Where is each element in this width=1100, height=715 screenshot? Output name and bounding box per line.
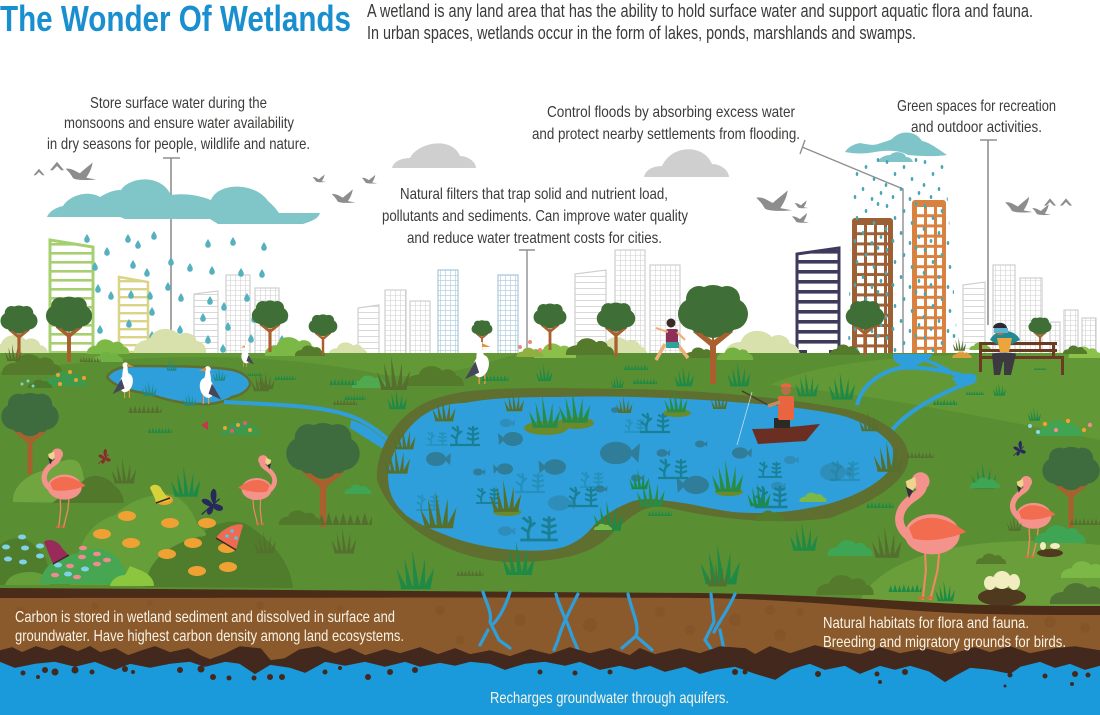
soil layer <box>0 590 1100 670</box>
soil mottling <box>15 600 1090 645</box>
grey clouds <box>392 143 729 177</box>
orange flowers <box>93 495 237 576</box>
teal rain cloud, left <box>47 179 320 224</box>
label: carbon storage: Carbon is stored in wetland sediment and dissolved in surface and <box>15 609 395 626</box>
buildings: left green and yellow <box>50 240 148 355</box>
label: natural filters: Natural filters that trap solid and nutrient load, <box>400 186 668 203</box>
man on bench with binoculars <box>979 323 1064 375</box>
label: store surface water: monsoons and ensure water availability <box>64 115 294 132</box>
big pond <box>377 388 908 562</box>
label: carbon storage <box>15 609 404 645</box>
label: recharges groundwater: Recharges groundwater through aquifers. <box>490 690 729 707</box>
butterfly wings <box>150 485 170 503</box>
building: dark tower <box>797 248 839 355</box>
label: natural habitats: Natural habitats for flora and fauna. <box>823 615 1029 632</box>
small nest <box>1037 542 1063 557</box>
connector: control floods <box>800 140 903 353</box>
grass tufts <box>5 337 1100 601</box>
label: control floods <box>532 104 800 143</box>
trees <box>0 285 1100 528</box>
fish <box>426 407 852 536</box>
scattered rocks <box>20 660 1090 688</box>
runner <box>656 318 688 360</box>
groundwater <box>0 660 1100 715</box>
dark rock band <box>0 647 1100 680</box>
label: carbon storage: groundwater. Have highest carbon density among land ecosystems. <box>15 628 404 645</box>
ground <box>0 353 1100 612</box>
groundwater roots <box>480 592 735 650</box>
background buildings <box>50 200 1096 355</box>
intro text <box>367 1 1033 43</box>
light background bushes <box>0 329 800 357</box>
buildings: grey skyline <box>194 250 1096 355</box>
label: natural habitats <box>823 615 1066 651</box>
birds <box>34 162 1072 223</box>
rain, right <box>848 158 958 352</box>
label: natural filters: pollutants and sediments. Can improve water quality <box>382 208 688 225</box>
connector: store water <box>163 158 180 360</box>
raindrops, left <box>84 231 288 373</box>
soil top band <box>0 588 1100 615</box>
label: store surface water <box>47 95 310 153</box>
label: green spaces: and outdoor activities. <box>911 119 1042 136</box>
label: store surface water: in dry seasons for people, wildlife and nature. <box>47 136 310 153</box>
pond bank <box>377 388 908 562</box>
lower-left flowering mounds <box>0 460 293 588</box>
fisherman in boat <box>737 383 820 445</box>
dragonflies <box>94 440 1026 517</box>
connector: green spaces <box>980 140 997 325</box>
label: control floods: Control floods by absorbing excess water <box>547 104 796 121</box>
streams <box>224 354 977 458</box>
label: green spaces: Green spaces for recreation <box>897 98 1056 115</box>
foreground bushes and nests <box>279 478 1100 606</box>
label: store surface water: Store surface water during the <box>90 95 267 112</box>
flamingos <box>44 448 1055 600</box>
mid-ground bushes <box>2 337 1100 412</box>
reed islands <box>490 389 743 516</box>
flowers and shrubs, mid left <box>20 340 1092 436</box>
nest with eggs <box>978 571 1026 606</box>
label: natural filters <box>382 186 688 247</box>
teal rain clouds, right <box>845 132 947 162</box>
seaweed <box>416 413 860 540</box>
storks <box>113 342 491 404</box>
building: orange tower <box>912 200 946 355</box>
bank reeds <box>384 391 904 474</box>
label: control floods: and protect nearby settlements from flooding. <box>532 126 800 143</box>
label: natural filters: and reduce water treatment costs for cities. <box>407 230 662 247</box>
pond water <box>388 397 893 551</box>
blue and pink flowers <box>2 534 89 576</box>
building: brown tower <box>852 218 893 355</box>
label: green spaces <box>897 98 1056 136</box>
connector: natural filters <box>519 250 535 390</box>
intro text: In urban spaces, wetlands occur in the form of lakes, ponds, marshlands and swamps. <box>367 23 916 43</box>
small pond <box>107 359 250 406</box>
